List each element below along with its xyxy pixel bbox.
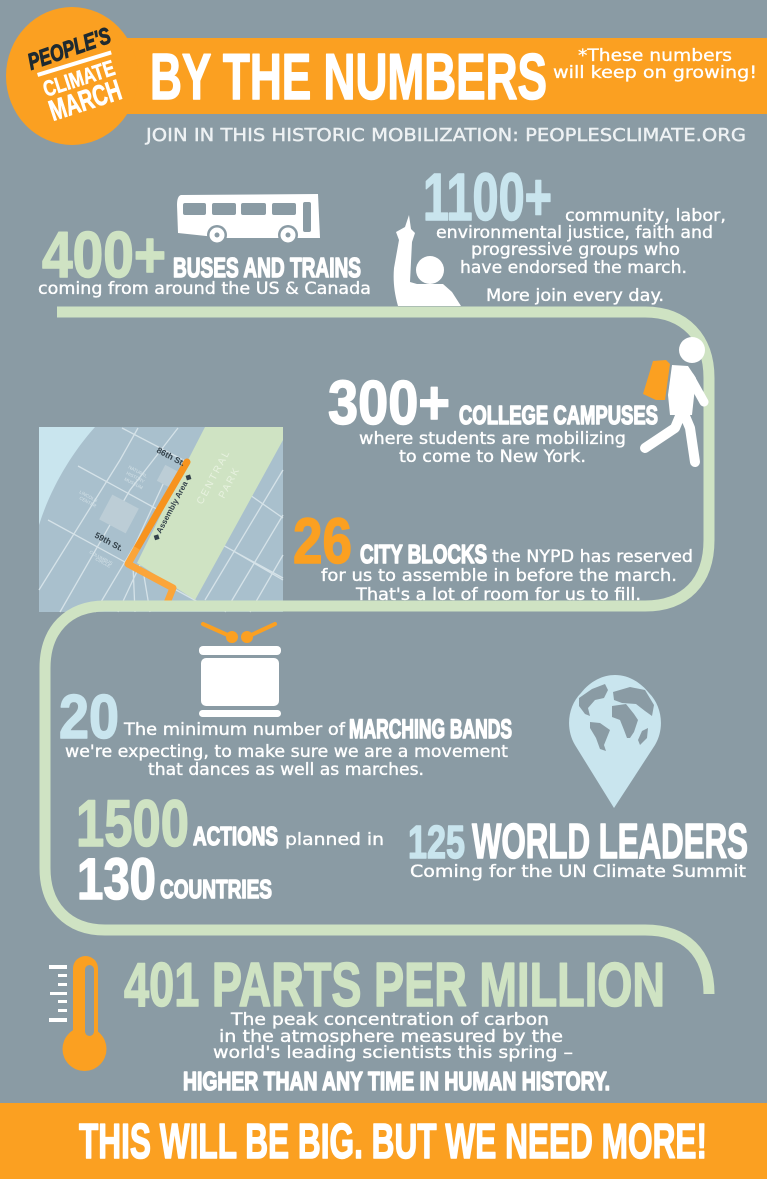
icon: drum (199, 624, 281, 717)
header banner (90, 38, 767, 114)
icon: thermometer (49, 956, 106, 1071)
logo: People's Climate March: CLIMATE (40, 55, 118, 102)
stat: 26 city blocks: CITY BLOCKS (360, 539, 487, 569)
map: Central Park assembly area: HISTORY (126, 470, 145, 484)
stat: 125 world leaders (408, 815, 748, 881)
stat: 400+ buses and trains: BUSES AND TRAINS (173, 252, 361, 283)
stat: 401 parts per million: world's leading scientists this spring – (213, 1043, 573, 1062)
winding march route ribbon (45, 312, 709, 994)
icon: hiker with backpack (643, 337, 705, 462)
logo: People's Climate March (6, 7, 138, 145)
stat: 20 marching bands: that dances as well as marches. (148, 760, 424, 779)
stat: 1100+ groups: have endorsed the march. (460, 258, 687, 277)
map: Central Park assembly area: CENTER (79, 495, 98, 509)
map: Central Park assembly area: LINCOLN (79, 489, 98, 503)
stat: 1500 actions in 130 countries: ACTIONS (193, 821, 278, 851)
map: Central Park assembly area: ◆ Assembly Area ◆ (150, 472, 194, 543)
stat: 125 world leaders: Coming for the UN Climate Summit (410, 862, 747, 881)
stat: 401 parts per million: in the atmosphere measured by the (219, 1027, 563, 1046)
stat: 1100+ groups (423, 160, 726, 305)
stat: 401 parts per million: The peak concentration of carbon (230, 1010, 549, 1029)
map: Central Park assembly area: MUSEUM (124, 476, 144, 490)
map: Central Park assembly area: COLUMBUS (89, 549, 113, 566)
map: Central Park assembly area: NATURAL (128, 464, 149, 479)
stat: 20 marching bands: MARCHING BANDS (349, 714, 512, 744)
map: Central Park assembly area: PARK (217, 465, 243, 500)
stat: 300+ college campuses: where students are mobilizing (359, 429, 626, 448)
stat: 20 marching bands (59, 683, 512, 779)
title: BY THE NUMBERS (150, 40, 547, 113)
icon: person with raised finger (394, 215, 461, 306)
map: Central Park assembly area: 59th St. (93, 530, 125, 553)
stat: 1100+ groups: progressive groups who (471, 240, 680, 259)
stat: 300+ college campuses (328, 369, 658, 466)
map: Central Park assembly area: CENTRAL (195, 448, 233, 506)
stat: 1100+ groups: community, labor, (565, 206, 726, 225)
stat: 125 world leaders: 125 (408, 816, 465, 868)
footer banner (0, 1103, 767, 1179)
stat: 300+ college campuses: COLLEGE CAMPUSES (459, 400, 658, 430)
stat: 26 city blocks: for us to assemble in before the march. (321, 566, 677, 585)
note: numbers will grow (553, 46, 757, 83)
stat: 1100+ groups: 1100+ (423, 160, 552, 235)
stat: 401 parts per million: HIGHER THAN ANY TIME IN HUMAN HISTORY. (183, 1066, 610, 1096)
stat: 1500 actions in 130 countries (76, 786, 384, 912)
stat: 1500 actions in 130 countries: planned in (285, 830, 384, 849)
stat: 1100+ groups: environmental justice, faith and (436, 223, 713, 242)
stat: 26 city blocks (293, 505, 693, 604)
stat: 1500 actions in 130 countries: COUNTRIES (160, 874, 272, 904)
stat: 26 city blocks: the NYPD has reserved (492, 547, 693, 566)
subheading: join the mobilization: JOIN IN THIS HISTORIC MOBILIZATION: PEOPLESCLIMATE.ORG (145, 125, 746, 146)
stat: 20 marching bands: we're expecting, to make sure we are a movement (65, 742, 509, 761)
stat: 1500 actions in 130 countries: 1500 (76, 786, 189, 860)
stat: 400+ buses and trains: coming from around the US & Canada (38, 279, 371, 298)
map: Central Park assembly area: 86th St. (155, 445, 187, 468)
stat: 400+ buses and trains: 400+ (42, 218, 166, 291)
stat: 401 parts per million (124, 951, 665, 1096)
stat: 400+ buses and trains (38, 218, 371, 298)
stat: 20 marching bands: The minimum number of (123, 720, 346, 739)
stat: 26 city blocks: That's a lot of room for us to fill. (355, 585, 641, 604)
note: numbers will grow: *These numbers (578, 46, 732, 66)
note: numbers will grow: will keep on growing! (553, 63, 757, 83)
map: Central Park assembly area: CIRCLE (95, 556, 111, 569)
stat: 1500 actions in 130 countries: 130 (77, 847, 156, 912)
stat: 1100+ groups: More join every day. (486, 286, 664, 305)
logo: People's Climate March: MARCH (45, 74, 126, 128)
icon: globe map pin (569, 675, 661, 808)
map: Central Park assembly area (39, 427, 283, 612)
stat: 300+ college campuses: to come to New York. (399, 447, 586, 466)
stat: 20 marching bands: 20 (59, 683, 119, 752)
stat: 26 city blocks: 26 (293, 505, 352, 577)
icon: bus (177, 194, 320, 245)
logo: People's Climate March: PEOPLE'S (24, 22, 114, 75)
stat: 300+ college campuses: 300+ (328, 369, 450, 438)
